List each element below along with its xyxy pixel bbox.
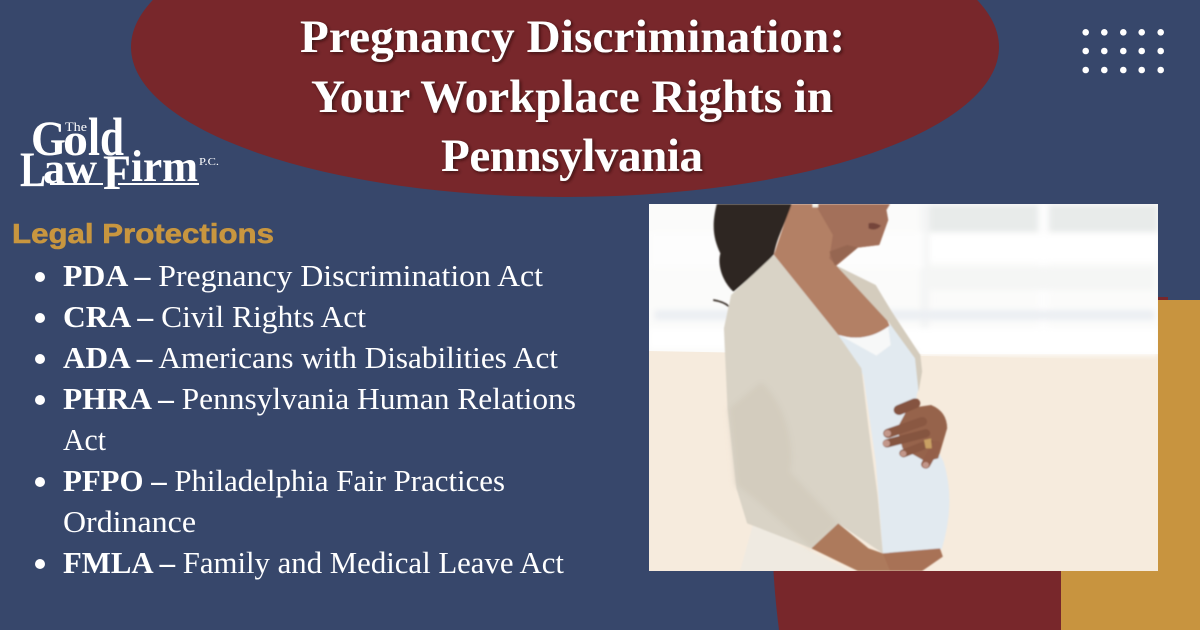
list: legal protections: PHRA – Pennsylvania Human Relations — [63, 381, 576, 416]
decorative dot grid icon — [1082, 29, 1164, 73]
title: Pregnancy Discrimination: — [300, 11, 845, 63]
list: legal protections: ADA – Americans with Disabilities Act — [63, 340, 558, 375]
list: legal protections: PFPO – Philadelphia Fair Practices — [63, 463, 505, 498]
shape: small red corner behind photo — [1150, 297, 1168, 303]
logo: The Gold Law Firm P.C.: L — [20, 141, 46, 197]
list: legal protections: PDA – Pregnancy Discrimination Act — [63, 258, 543, 293]
list: legal protections: Ordinance — [63, 504, 196, 539]
logo: The Gold Law Firm P.C.: P.C. — [199, 157, 219, 168]
list: legal protections: CRA – Civil Rights Act — [63, 299, 366, 334]
heading: Legal Protections: Legal Protections — [12, 218, 274, 249]
shape: gold block — [1061, 300, 1200, 630]
title: Your Workplace Rights in — [311, 71, 833, 123]
logo: The Gold Law Firm P.C. — [20, 107, 219, 200]
logo: The Gold Law Firm P.C.: ld — [88, 107, 124, 167]
logo: The Gold Law Firm P.C.: The — [65, 119, 87, 134]
logo: The Gold Law Firm P.C.: G — [31, 110, 66, 166]
shape: bottom red block — [773, 560, 1168, 630]
list: legal protections — [35, 258, 576, 580]
logo: The Gold Law Firm P.C.: F — [103, 144, 131, 200]
list: legal protections: Act — [63, 422, 106, 457]
logo: The Gold Law Firm P.C.: o — [63, 114, 88, 165]
title: Pennsylvania — [441, 130, 703, 182]
logo: The Gold Law Firm P.C.: aw — [43, 144, 97, 193]
list: legal protections: FMLA – Family and Medical Leave Act — [63, 545, 564, 580]
photo: pregnant woman in cardigan — [649, 204, 1158, 571]
title ellipse — [131, 0, 999, 197]
logo: The Gold Law Firm P.C.: irm — [131, 142, 198, 191]
title — [300, 11, 845, 182]
